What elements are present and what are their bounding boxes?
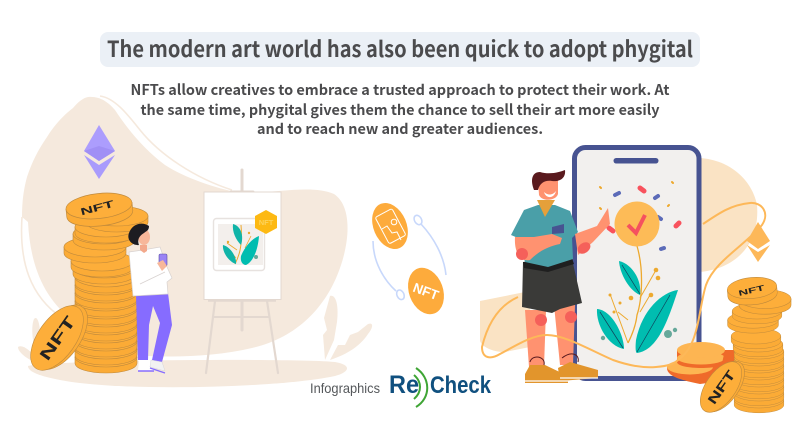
tilted coin: [20, 294, 98, 381]
intro paragraph: [130, 79, 670, 139]
canvas: [204, 192, 281, 300]
intro paragraph: and to reach new and greater audiences.: [257, 118, 543, 139]
right coin stack: [726, 275, 791, 413]
phone: [574, 148, 699, 378]
background plant leaves: [18, 296, 372, 362]
title: The modern art world has also been quick to adopt phygital: [107, 32, 693, 64]
logo: Re: [389, 371, 419, 399]
background blob: left: [22, 96, 348, 356]
intro paragraph: the same time, phygital gives them the chance to sell their art more easily: [140, 99, 660, 120]
coin label NFT: NFT: [79, 198, 116, 218]
NFT hexagon badge: [255, 210, 277, 234]
flower with check: [597, 202, 678, 353]
connecting line: [482, 203, 765, 367]
coin label: NFT: [705, 368, 739, 407]
logo: Infographics: [310, 380, 380, 396]
icon: NFT coin: [402, 263, 450, 319]
tilted coin right: [692, 353, 753, 421]
woman with phone: [128, 224, 172, 373]
icon: NFT coin: NFT: [411, 280, 441, 303]
intro paragraph: NFTs allow creatives to embrace a trusted approach to protect their work. At: [130, 79, 670, 100]
icon: purple ethereum: [84, 125, 115, 179]
man pointing: [511, 170, 610, 383]
icon: image coin: [365, 197, 415, 255]
background blob: right: [480, 158, 757, 352]
logo: Check: [430, 372, 492, 399]
coin label NFT: NFT: [738, 284, 766, 298]
flat coins: [667, 342, 736, 384]
coin label: NFT: [36, 313, 79, 364]
title pill: [100, 32, 700, 67]
logo: [310, 368, 492, 407]
NFT hexagon badge: NFT: [259, 218, 274, 227]
cycle arrows: [373, 214, 446, 301]
framed art: [214, 218, 264, 270]
left coin stack: [64, 190, 148, 373]
easel: [204, 170, 281, 373]
confetti: [600, 182, 679, 249]
ground shadow: [28, 360, 347, 387]
icon: orange ethereum: [747, 222, 770, 262]
